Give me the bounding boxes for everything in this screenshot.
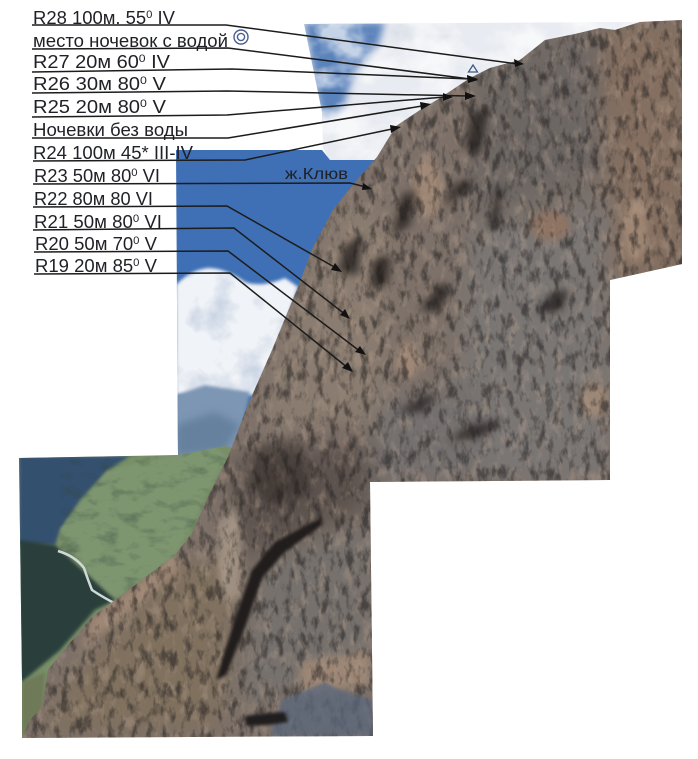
label: R20 [34,234,366,355]
label: R25: 0 [140,98,147,110]
label: R28: IV [152,8,175,28]
label: R27: 0 [139,53,146,65]
icon: water source target [234,30,248,44]
label: R25 [32,93,453,117]
label: R21: 0 [133,213,139,225]
label: R23 [33,166,372,190]
label: camp with water [32,31,478,83]
label: camp without water: Ночевки без воды [33,120,188,140]
label: R19 [34,256,353,372]
label: R26: 0 [140,75,147,87]
label: R25: V [147,97,166,117]
label: R27 [32,52,478,83]
rock: dark cracks [250,105,570,510]
label: R19: R19 20м 85 [35,256,130,276]
label: R19: V [139,256,157,276]
label: camp without water [32,102,431,140]
label: R25: R25 20м 80 [33,97,128,117]
label: R21: VI [139,212,162,232]
labels and pointer lines [32,8,524,372]
rock: tan patches [80,158,647,695]
label: R24: R24 100м 45* III-IV [33,143,193,163]
label: R22: R22 80м 80 VI [34,189,153,209]
label: R20: 0 [133,235,139,247]
label: R26: R26 30м 80 [33,74,128,94]
icon: summit triangle [468,65,478,72]
label: R19: 0 [133,257,139,269]
photo: valley [19,445,244,740]
label: R27: R27 20м 60 [33,52,128,72]
label: R28: R28 100м. 55 [33,8,143,28]
label: R20: V [139,234,157,254]
label: R28: 0 [146,9,152,21]
label: R22 [33,189,342,272]
label: R24 [33,125,401,163]
label: ж.Клюв: ж.Клюв [285,166,348,183]
photo: upper sky [304,22,639,160]
label: R28 [32,8,524,67]
label: R23: 0 [131,167,138,179]
label: R23: VI [138,166,160,186]
photo: lower sky and clouds [176,150,374,455]
label: R26: V [147,74,166,94]
label: R21: R21 50м 80 [34,212,129,232]
label: R27: IV [146,52,170,72]
label: R21 [33,212,350,319]
label: R20: R20 50м 70 [35,234,130,254]
label: R23: R23 50м 80 [34,166,129,186]
label: camp with water: место ночевок с водой [33,31,228,51]
rock: main gully [216,517,322,680]
label: R26 [32,74,476,100]
rock: bluish boulders [245,682,373,736]
